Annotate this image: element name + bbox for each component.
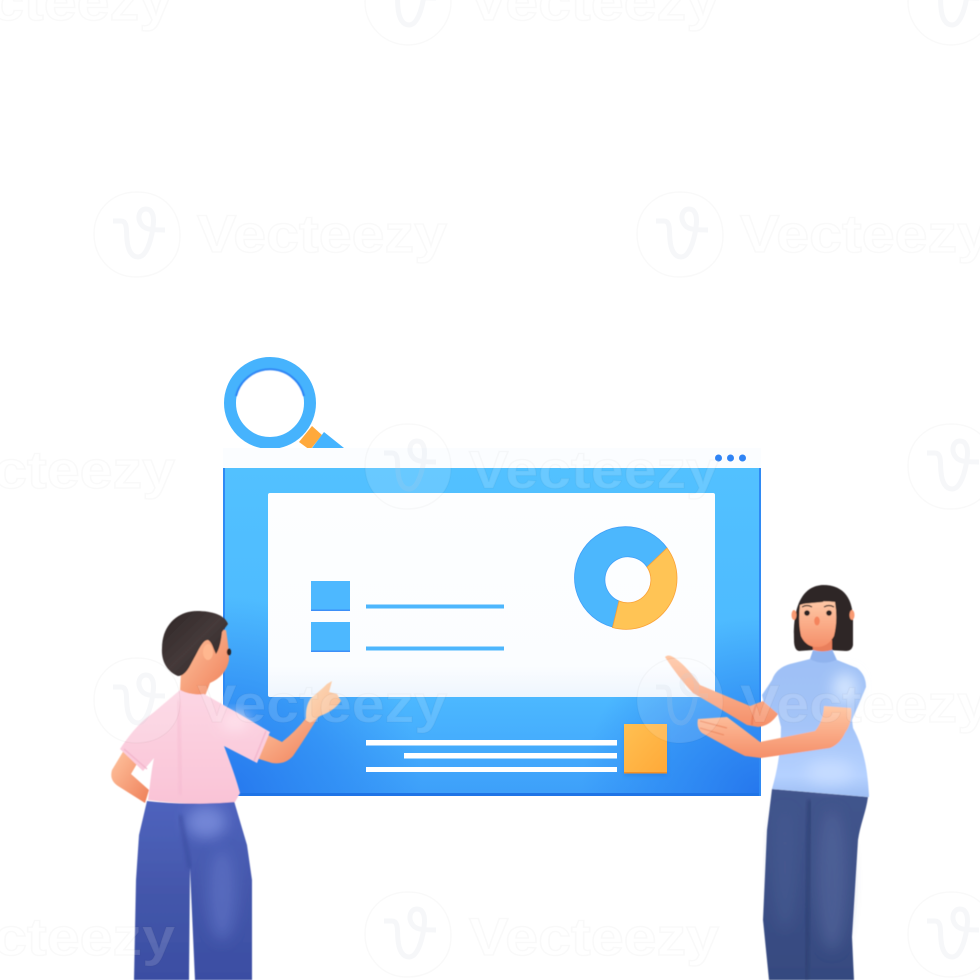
watermark row 4 [94,658,980,743]
watermark row 5: Vecteezy [469,908,720,967]
man right arm [256,714,320,763]
watermark row 3 [0,424,980,509]
man shirt [120,690,270,804]
bottom text lines [366,740,617,772]
window title bar [223,448,761,469]
woman face [799,588,836,652]
person: man in pink shirt [111,611,341,980]
man pointing hand [306,681,341,723]
donut chart [575,527,677,629]
man trousers [134,801,252,980]
woman top [762,649,869,797]
icon: magnifying glass [230,363,344,450]
watermark row 5 [0,892,980,977]
list lines [366,604,504,650]
woman back hair [794,585,853,651]
man head [162,611,231,696]
watermark row 3: Vecteezy [469,441,720,500]
window body [223,468,761,796]
woman forearm and open hand [698,706,851,758]
watermark row 1 [0,0,980,45]
watermark row 2: Vecteezy [197,205,448,264]
window control dots [715,454,746,462]
woman trousers [763,789,868,980]
man left arm on hip [111,750,149,803]
orange square [624,724,667,776]
watermark row 4: Vecteezy [740,675,980,734]
watermark row 4: Vecteezy [197,675,448,734]
person: woman in blue top [665,585,869,980]
dashboard panel [268,493,715,697]
watermark row 2 [94,192,980,277]
list squares [311,581,350,652]
watermark row 2: Vecteezy [740,205,980,264]
browser window [223,448,761,796]
woman upper arm and raised hand [665,656,778,727]
woman ears [792,610,854,620]
